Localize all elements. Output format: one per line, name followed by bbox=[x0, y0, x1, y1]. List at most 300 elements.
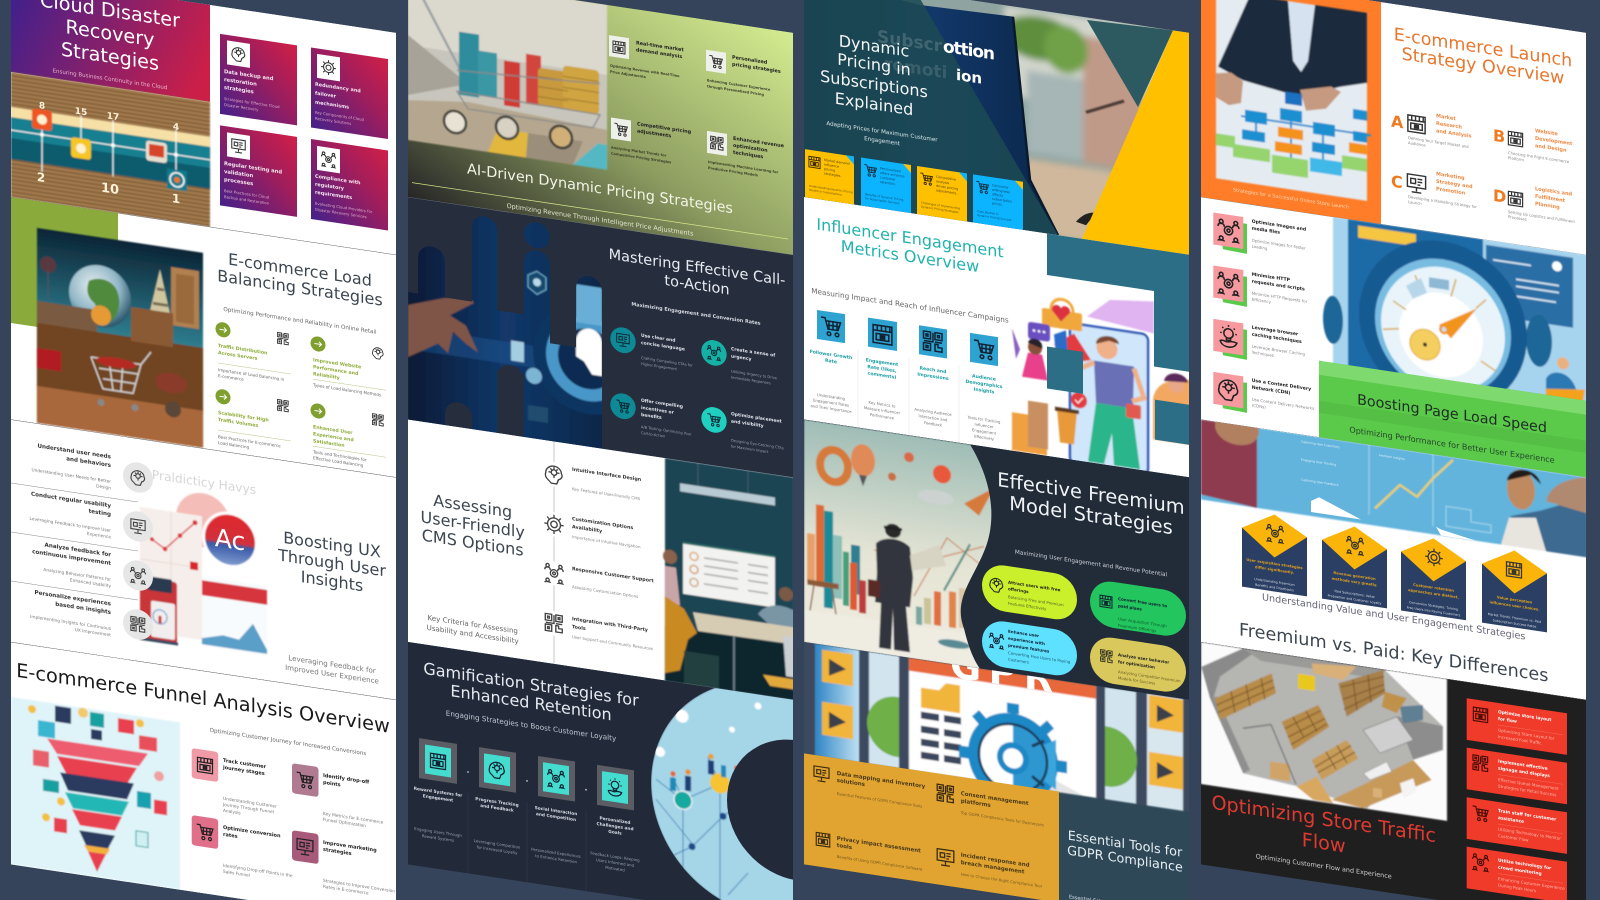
metric: engagement rate: Rate (likes, bbox=[867, 364, 897, 374]
item: customization: Availability bbox=[572, 524, 603, 535]
item: personalized pricing: pricing strategies bbox=[732, 62, 781, 75]
card: data backup bbox=[220, 34, 297, 125]
title: Strategies bbox=[61, 38, 159, 75]
pill: attract users: offerings bbox=[1008, 586, 1029, 594]
item: personalized pricing: Enhancing Customer Experience bbox=[707, 78, 771, 92]
metric: reach and impressions: Reach and bbox=[920, 365, 946, 375]
metric: audience demographics: Effectively bbox=[974, 434, 995, 442]
orange tools panel bbox=[804, 753, 1059, 900]
panel: Boosting Page Load Speed bbox=[1201, 197, 1587, 478]
item: enhanced experience: Tools and Technologies for bbox=[312, 449, 367, 462]
GDPR sheet and gear illustration bbox=[804, 642, 1190, 830]
subtitle: Leveraging Feedback for bbox=[288, 653, 376, 675]
item: improved performance: Improved Website bbox=[313, 357, 361, 371]
item: compelling incentives: Offer compelling bbox=[641, 398, 683, 410]
metric: follower growth: Engagement Rates bbox=[813, 397, 849, 408]
tool: incident response: How to Choose the Right Compliance Tool bbox=[961, 872, 1042, 889]
whiteboard notes: Capturing new Customers bbox=[1301, 440, 1340, 449]
item: identify drop-off points: Identify drop-off bbox=[323, 773, 370, 786]
item: personalize experiences: UX Improvement bbox=[75, 627, 111, 639]
item: improve marketing strategies: Improve marketing bbox=[323, 840, 377, 854]
influencer illustration bbox=[1012, 280, 1190, 481]
title: Influencer Engagement bbox=[816, 215, 1004, 262]
whiteboard notes bbox=[1301, 440, 1405, 497]
item: personalize experiences bbox=[11, 581, 153, 645]
item: customer support: Responsive Customer Support bbox=[572, 566, 654, 584]
item: track journey stages bbox=[192, 748, 277, 814]
item: intuitive interface bbox=[543, 461, 642, 502]
metric: follower growth: Follower Growth bbox=[810, 349, 852, 361]
title: User-Friendly bbox=[421, 507, 525, 542]
speedometer illustration bbox=[1323, 215, 1587, 431]
item C: C bbox=[1391, 172, 1403, 192]
metric: audience demographics bbox=[965, 332, 1003, 443]
item: clear language: Crafting Compelling CTAs for bbox=[641, 356, 693, 368]
panel: E-commerce Funnel Analysis Overview bbox=[11, 642, 397, 900]
title: Assessing bbox=[433, 491, 512, 522]
card: testing: validation bbox=[224, 169, 253, 179]
title: Pricing in bbox=[837, 50, 911, 79]
card: personalized offers: Benefits of Dynamic Pricing bbox=[865, 192, 904, 202]
pill: analyze behavior: Analyze user behavior bbox=[1118, 652, 1170, 665]
item: social interaction bbox=[531, 755, 581, 865]
card: testing bbox=[220, 125, 297, 217]
card: competitive analysis: Competitive bbox=[936, 175, 956, 182]
card: data backup: strategies bbox=[224, 85, 254, 95]
tool: incident response: breach management bbox=[961, 860, 1025, 876]
item: placement bbox=[701, 405, 784, 456]
item: placement: Designing Eye-Catching CTAs bbox=[731, 438, 784, 450]
panel: Assessing User-Friendly CMS Options bbox=[408, 420, 794, 700]
card: competitive analysis: Dynamic Pricing Strategies bbox=[921, 205, 959, 214]
item C bbox=[1391, 165, 1477, 214]
timeline numbers: 17 bbox=[107, 111, 119, 123]
panel: Mastering Effective Call-to-Action bbox=[408, 197, 794, 498]
card: revenue generation: Proposition and Customer Loyalty bbox=[1328, 594, 1381, 606]
item: enhanced revenue: optimization bbox=[733, 143, 768, 154]
card: testing: Regular testing and bbox=[224, 161, 282, 176]
item: third-party bbox=[543, 610, 653, 651]
item: competitive pricing bbox=[611, 117, 692, 168]
card: user acquisition bbox=[1242, 510, 1307, 596]
item: usability testing: Conduct regular usability bbox=[31, 492, 111, 510]
title: Model Strategies bbox=[1009, 492, 1173, 539]
green title banner bbox=[1319, 361, 1587, 478]
item: identify drop-off points: Key Metrics for E-commerce bbox=[323, 811, 384, 826]
metric: reach and impressions: Feedback bbox=[924, 420, 943, 428]
item A: Research bbox=[1436, 121, 1462, 131]
item: reward systems bbox=[414, 737, 463, 844]
pill: attract users: Features Effectively bbox=[1008, 601, 1047, 611]
subtitle: Engaging Strategies to Boost Customer Loyalty bbox=[446, 709, 617, 743]
column 1 of slide thumbnails bbox=[11, 0, 397, 900]
item: content delivery: Use a Content Delivery bbox=[1252, 378, 1311, 393]
item: progress tracking bbox=[474, 746, 521, 856]
item: browser caching: Leverage Browser Caching bbox=[1252, 344, 1306, 357]
subtitle: Optimizing Customer Flow and Experience bbox=[1256, 852, 1392, 881]
item: scalability bbox=[215, 389, 291, 450]
pill: attract users bbox=[982, 562, 1077, 622]
laptop screen text: ottion bbox=[943, 37, 995, 65]
card: signage: signage and displays bbox=[1498, 766, 1550, 779]
tool: data mapping: Essential Features of GDPR Compliance Tools bbox=[837, 791, 922, 809]
panel: Cloud Disaster Recovery Strategies bbox=[11, 0, 397, 255]
item: social interaction: and Competition bbox=[536, 811, 576, 823]
subtitle: Usability and Accessibility bbox=[427, 623, 519, 646]
item C: Marketing bbox=[1436, 171, 1465, 182]
item: analyze feedback: Analyzing Behavior Patterns for bbox=[43, 567, 111, 583]
item: usability testing: Leveraging Feedback to Improve User bbox=[30, 516, 111, 534]
panel: E-commerce Launch Strategy Overview bbox=[1201, 0, 1587, 255]
item: enhanced experience bbox=[310, 402, 386, 471]
item: content delivery: (CDNs) bbox=[1252, 403, 1266, 410]
item: enhanced revenue: Predictive Pricing Models bbox=[708, 166, 758, 177]
item: improved performance bbox=[310, 335, 386, 398]
item: compelling incentives: Call-to-Action bbox=[641, 431, 665, 439]
tool: privacy assessment: Privacy impact assessment bbox=[837, 836, 921, 855]
item: clear language: concise language bbox=[641, 340, 685, 353]
pill: enhance experience: Customers bbox=[1008, 657, 1029, 665]
item: analyze feedback: Analyze feedback for bbox=[45, 543, 111, 559]
card: consumer willingness: willingness bbox=[992, 188, 1010, 194]
item: minimize HTTP: requests and scripts bbox=[1252, 279, 1305, 293]
funnel illustration bbox=[11, 697, 180, 889]
card: value perception bbox=[1482, 546, 1547, 632]
card: personalized offers: offers enhance bbox=[880, 171, 904, 179]
item: enhanced experience: Enhanced User bbox=[313, 424, 353, 436]
card: personalized offers: retention. bbox=[880, 180, 896, 186]
item: scalability: Traffic Volumes bbox=[218, 417, 258, 429]
item B: Choosing the Right E-commerce bbox=[1508, 150, 1570, 164]
item: social interaction: to Enhance Retention bbox=[535, 853, 577, 864]
laptop screen text: ion bbox=[956, 66, 982, 88]
title: E-commerce Load bbox=[228, 250, 372, 290]
item: competitive pricing: adjustments bbox=[637, 128, 671, 139]
title: Gamification Strategies for bbox=[423, 659, 639, 710]
card: market demand: Models in Subscriptions bbox=[809, 188, 842, 197]
panel: Freemium vs. Paid: Key Differences bbox=[1201, 408, 1587, 700]
tool: privacy assessment: Benefits of Using GDPR Compliance Software bbox=[837, 854, 923, 872]
item: reward systems: Engaging Users Through bbox=[414, 826, 462, 838]
item D: Logistics and bbox=[1535, 186, 1573, 198]
card: train staff: Utilizing Technology to Monitor bbox=[1498, 827, 1561, 841]
card: competitive analysis: adjustments. bbox=[936, 188, 957, 196]
card: market demand: Understanding Dynamic Pricing bbox=[809, 184, 853, 194]
tool: consent management: Top GDPR Compliance Tools for Businesses bbox=[960, 810, 1044, 827]
whiteboard notes: Capturing User Feedback bbox=[1301, 478, 1339, 487]
item: real-time demand: Optimizing Revenue with Real-Time bbox=[610, 64, 680, 78]
subtitle: Engagement bbox=[864, 136, 901, 147]
pill: attract users: Attract users with free bbox=[1008, 580, 1061, 592]
item C: Launch bbox=[1408, 199, 1422, 206]
card: consumer willingness: prices. bbox=[992, 201, 1003, 207]
item: personalize experiences: Implementing Insights for Continuous bbox=[30, 614, 112, 632]
card: consumer willingness: Case Studies in bbox=[977, 209, 999, 216]
item: minimize HTTP bbox=[1213, 266, 1308, 316]
item: optimize conversion rates: Identifying Drop-off Points in the bbox=[223, 863, 293, 879]
item: real-time demand: Price Adjustments bbox=[610, 70, 646, 79]
item: third-party: Tools bbox=[572, 624, 586, 632]
item: enhanced experience: Effective Load Balancing bbox=[313, 455, 364, 468]
item: browser caching: Techniques bbox=[1251, 349, 1274, 358]
photo: globe and shopping cart bbox=[37, 228, 203, 448]
item: clear language bbox=[610, 326, 693, 374]
item: reward systems: Reward Systems bbox=[422, 833, 454, 843]
timeline image bbox=[11, 72, 210, 227]
card: crowd monitoring: Utilize technology for bbox=[1498, 858, 1552, 872]
item: understand user needs: Design bbox=[96, 483, 111, 492]
item: minimize HTTP: Efficiency bbox=[1252, 297, 1272, 305]
card: consumer willingness: Consumer bbox=[992, 183, 1009, 190]
subtitle: Measuring Impact and Reach of Influencer Campaigns bbox=[811, 286, 1009, 325]
panel: Influencer Engagement Metrics Overview bbox=[804, 197, 1190, 481]
card: consumer willingness: affects bbox=[992, 192, 1003, 198]
item: track journey stages: Understanding Customer bbox=[223, 796, 277, 810]
item: improve marketing strategies: Rates in E-commerce bbox=[323, 884, 369, 897]
metric: follower growth: and Their Importance bbox=[811, 403, 852, 414]
card: consumer willingness: Dynamic Pricing Success bbox=[977, 213, 1012, 222]
pill: convert free users: Freemium Offerings bbox=[1118, 623, 1156, 633]
item: improve marketing strategies: strategies bbox=[323, 847, 352, 857]
item: analyze feedback bbox=[11, 532, 153, 596]
laptop screen text: Subscr bbox=[877, 27, 943, 57]
pill: analyze behavior: Analyzing Competitor Freemium bbox=[1118, 669, 1181, 684]
item A: Audience bbox=[1408, 140, 1426, 148]
item: customer support bbox=[543, 560, 654, 601]
pill: attract users: Balancing Free and Premium bbox=[1008, 594, 1064, 607]
item: personalized pricing bbox=[706, 50, 781, 99]
item: clear language: Higher Engagement bbox=[641, 362, 678, 371]
title: Optimizing Store Traffic bbox=[1211, 791, 1436, 847]
metric: engagement rate: comments) bbox=[868, 371, 896, 381]
title: E-commerce Funnel Analysis Overview bbox=[16, 659, 390, 738]
card: revenue generation bbox=[1322, 522, 1387, 608]
item: third-party: User Support and Community Resources bbox=[572, 634, 653, 651]
item: compelling incentives: incentives or bbox=[641, 405, 675, 416]
dark inner circle bbox=[727, 730, 867, 891]
teal decorative blocks bbox=[1047, 233, 1190, 445]
card: value perception: Value perception bbox=[1497, 595, 1533, 605]
item: placement: for Maximum Impact bbox=[731, 444, 769, 454]
card: testing: Best Practices for Cloud bbox=[224, 188, 270, 200]
card: competitive analysis: Challenges of Implementing bbox=[921, 201, 960, 210]
item C: Strategy and bbox=[1436, 179, 1473, 190]
item: personalize experiences: Personalize experiences bbox=[34, 590, 112, 608]
card: customer retention: Free Users into Paying Customers bbox=[1407, 605, 1461, 617]
card: revenue generation: Revenue generation bbox=[1333, 571, 1376, 581]
item B: B bbox=[1493, 126, 1505, 147]
item: usability testing: testing bbox=[89, 509, 111, 518]
item: progress tracking: and Feedback bbox=[480, 803, 514, 814]
card: testing: processes bbox=[224, 177, 253, 187]
title: Dynamic bbox=[839, 31, 909, 61]
item: intuitive interface: Intuitive Interface Design bbox=[572, 467, 642, 483]
card: redundancy bbox=[311, 48, 388, 139]
metric: audience demographics: Audience bbox=[972, 373, 996, 383]
item: improved performance: Reliability bbox=[313, 371, 340, 381]
panel: Boosting UX Through User Insights bbox=[11, 420, 397, 700]
card: crowd monitoring bbox=[1467, 847, 1567, 900]
item: personalized pricing: Personalized bbox=[732, 55, 768, 66]
title: Freemium vs. Paid: Key Differences bbox=[1239, 620, 1548, 687]
item: customization: Importance of Intuitive Navigation bbox=[572, 534, 641, 549]
item: enhanced revenue: Enhanced revenue bbox=[733, 136, 785, 149]
subtitle: Ensuring Business Continuity in the Cloud bbox=[53, 68, 167, 91]
item: real-time demand: demand analysis bbox=[636, 47, 682, 60]
item: track journey stages: Journey Through Funnel bbox=[222, 802, 274, 815]
metric: audience demographics: Engagement bbox=[972, 427, 997, 436]
card: compliance: Compliance with bbox=[315, 174, 361, 186]
green accent block bbox=[11, 197, 118, 339]
metric: audience demographics: Tools for Tracking bbox=[967, 414, 1001, 425]
item: compelling incentives: benefits bbox=[641, 412, 662, 421]
tool: privacy assessment bbox=[816, 832, 923, 872]
card: consumer willingness bbox=[973, 174, 1023, 230]
item: usability testing bbox=[11, 483, 153, 547]
pill: enhance experience: Enhance user bbox=[1008, 629, 1040, 638]
subtitle: Optimizing Customer Journey for Increased Conversions bbox=[210, 728, 366, 757]
panel: Gamification Strategies for Enhanced Retention bbox=[408, 629, 885, 900]
card: data backup: Data backup and bbox=[224, 69, 274, 82]
card: redundancy: mechanisms bbox=[315, 100, 349, 111]
card: crowd monitoring: During Peak Hours bbox=[1498, 883, 1536, 893]
item D: Fulfillment bbox=[1535, 194, 1566, 204]
item: track journey stages: Track customer bbox=[223, 758, 267, 770]
faded illustration label: Praldicticy Havys bbox=[152, 468, 256, 497]
panel: Dynamic Pricing in Subscriptions Explained bbox=[804, 0, 1190, 258]
item: intuitive interface: Key Features of User-Friendly CMS bbox=[572, 486, 641, 501]
item: improved performance: Performance and bbox=[313, 364, 358, 377]
item: personalized challenges: Motivated bbox=[605, 865, 625, 873]
item: competitive pricing: Competitive Pricing Strategies bbox=[611, 151, 671, 164]
item: understand user needs: and behaviors bbox=[66, 456, 112, 469]
item: enhanced revenue: techniques bbox=[733, 150, 763, 160]
businessman with charts illustration bbox=[804, 420, 1004, 672]
column 3 of slide thumbnails bbox=[804, 0, 1190, 900]
item: understand user needs: Understand user needs bbox=[37, 443, 112, 461]
item: track journey stages: Analysis bbox=[223, 808, 241, 817]
item: improve marketing strategies: Strategies to Improve Conversion bbox=[323, 878, 395, 895]
title: Enhanced Retention bbox=[450, 681, 612, 724]
item: understand user needs: Understanding User Needs for Better bbox=[31, 467, 111, 485]
item: traffic distribution: Across Servers bbox=[218, 350, 258, 362]
metric: follower growth bbox=[810, 309, 852, 414]
timeline numbers: 15 bbox=[75, 107, 87, 118]
title: CMS Options bbox=[422, 526, 524, 560]
timeline numbers: 10 bbox=[101, 181, 119, 198]
metric: reach and impressions: Interaction and bbox=[919, 413, 948, 423]
card: store layout: for flow bbox=[1498, 716, 1517, 725]
item: progress tracking: Progress Tracking bbox=[475, 796, 519, 809]
title: AI-Driven Dynamic Pricing Strategies bbox=[467, 161, 733, 217]
item: personalized challenges bbox=[590, 764, 640, 875]
subtitle: Adapting Prices for Maximum Customer bbox=[826, 121, 938, 144]
metric: audience demographics: Demographics bbox=[965, 379, 1003, 390]
item: personalized challenges: Feedback Loops: Keeping bbox=[590, 850, 640, 863]
subtitle: Improved User Experience bbox=[285, 663, 379, 686]
item: analyze feedback: continuous improvement bbox=[32, 549, 111, 567]
item B: and Design bbox=[1535, 143, 1567, 154]
item: scalability: Load Balancing bbox=[218, 440, 250, 450]
item A: Defining Your Target Market and bbox=[1408, 135, 1469, 149]
item D bbox=[1493, 180, 1575, 229]
metric: engagement rate: Performance bbox=[870, 412, 895, 421]
item: optimize images: Optimize images and bbox=[1252, 219, 1306, 233]
title: Effective Freemium bbox=[997, 468, 1185, 519]
metric: engagement rate bbox=[864, 317, 901, 421]
card: customer retention: Customer retention bbox=[1413, 583, 1454, 593]
pill: enhance experience: experience with bbox=[1008, 636, 1045, 646]
card: market demand bbox=[805, 149, 854, 204]
card: signage: Implement effective bbox=[1498, 759, 1548, 772]
title: to-Action bbox=[664, 272, 730, 299]
card: user acquisition: User acquisition strategies bbox=[1246, 558, 1303, 570]
item: personalize experiences: based on insights bbox=[55, 602, 112, 616]
item: sense of urgency bbox=[701, 338, 778, 386]
card: redundancy: Redundancy and bbox=[315, 82, 361, 95]
timeline numbers: 2 bbox=[37, 170, 45, 185]
item: competitive pricing: Analyzing Market Trends for bbox=[611, 145, 667, 158]
card: customer retention bbox=[1401, 534, 1466, 620]
whiteboard notes: Engaging User Tracking bbox=[1301, 458, 1336, 467]
metric: follower growth: Rate bbox=[825, 358, 837, 365]
item: compelling incentives: A/B Testing: Optimizing Your bbox=[641, 425, 692, 437]
metric: audience demographics: Influencer bbox=[974, 422, 994, 429]
item A: A bbox=[1391, 112, 1404, 132]
white heading letters on sheet: GPR bbox=[950, 643, 1053, 702]
tool: data mapping: Data mapping and inventory bbox=[837, 771, 926, 790]
tool: incident response: Incident response and bbox=[961, 853, 1030, 869]
pill: analyze behavior: for optimization bbox=[1118, 659, 1155, 670]
metric: engagement rate: Engagement bbox=[866, 357, 899, 368]
title: Recovery bbox=[66, 15, 154, 51]
item: compelling incentives bbox=[610, 392, 692, 443]
metric: audience demographics: Insights bbox=[974, 386, 995, 396]
dashboard illustration bbox=[140, 484, 267, 659]
timeline numbers: 1 bbox=[172, 191, 180, 206]
title: Flow bbox=[1302, 828, 1346, 858]
card: signage: Strategies for Retail Success bbox=[1498, 784, 1556, 797]
item: progress tracking: for Increased Loyalty bbox=[477, 844, 518, 856]
item: optimize conversion rates: Sales Funnel bbox=[223, 869, 250, 879]
item: browser caching: caching techniques bbox=[1252, 332, 1302, 345]
item: social interaction: Personalized Experiences bbox=[531, 847, 581, 859]
item: browser caching: Leverage browser bbox=[1252, 325, 1299, 338]
item: content delivery: Use Content Delivery Networks bbox=[1252, 397, 1314, 411]
card: customer retention: Conversion Strategies: Turning bbox=[1409, 600, 1458, 612]
item: enhanced experience: Satisfaction bbox=[313, 438, 345, 449]
card: value perception: influences user choices. bbox=[1489, 600, 1540, 612]
item: placement: Optimize placement bbox=[731, 411, 783, 425]
item: optimize conversion rates: Optimize conversion bbox=[223, 825, 281, 839]
card: competitive analysis: analysis bbox=[936, 179, 950, 185]
title: Explained bbox=[835, 89, 913, 119]
item: optimize images: Optimize Images for Faster bbox=[1252, 238, 1306, 251]
card: data backup: Strategies for Effective Cloud bbox=[224, 96, 280, 109]
item: enhanced experience: Experience and bbox=[313, 431, 354, 443]
item: optimize conversion rates: rates bbox=[223, 832, 238, 840]
item: content delivery: Network (CDN) bbox=[1252, 385, 1290, 396]
timeline numbers: 4 bbox=[173, 122, 179, 133]
subtitle: Optimizing Revenue Through Intelligent Price Adjustments bbox=[507, 202, 694, 238]
card: market demand: influence bbox=[824, 163, 839, 169]
card: revenue generation: Paid Subscriptions: Value bbox=[1335, 589, 1374, 599]
subtitle: Optimizing Performance and Reliability in Online Retail bbox=[223, 307, 377, 336]
metric: reach and impressions: Analyzing Audience bbox=[914, 407, 952, 417]
item: track journey stages: journey stages bbox=[222, 765, 265, 777]
card: data backup: Disaster Recovery bbox=[224, 102, 259, 112]
tool: consent management: Consent management bbox=[961, 791, 1029, 807]
